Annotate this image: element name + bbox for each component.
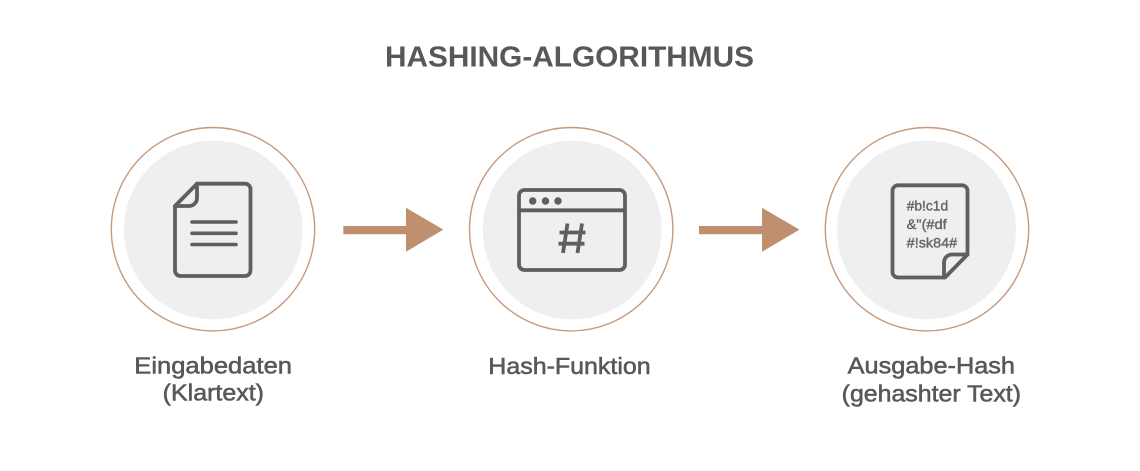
- inner disc 2: [483, 141, 662, 319]
- arrow 1: [343, 208, 443, 252]
- panel: output hash: [825, 128, 1029, 407]
- icon: document: [175, 184, 250, 276]
- panel: input data: [111, 128, 315, 406]
- outer ring 1: [111, 128, 315, 331]
- title: HASHING-ALGORITHMUS: [385, 42, 754, 74]
- label: Eingabedaten: Eingabedaten: [134, 352, 292, 378]
- inner disc 3: [837, 141, 1016, 319]
- icon: hashed document: [892, 185, 968, 278]
- hashed text: #!sk84#: [907, 234, 957, 250]
- label: Hash-Funktion: Hash-Funktion: [488, 353, 651, 379]
- outer ring 3: [825, 128, 1029, 331]
- label: Klartext: (Klartext): [163, 380, 264, 406]
- outer ring 2: [470, 128, 673, 331]
- arrow 2: [699, 208, 800, 252]
- label: Ausgabe-Hash: Ausgabe-Hash: [848, 352, 1015, 378]
- hashed text: &"(#df: [907, 216, 947, 232]
- label: gehashter Text: (gehashter Text): [842, 381, 1021, 407]
- icon: browser window with hash: [519, 190, 625, 270]
- panel: hash function: [470, 128, 673, 379]
- inner disc 1: [124, 141, 303, 319]
- hashed text: #b!c1d: [907, 198, 948, 214]
- hashed text: [907, 198, 957, 250]
